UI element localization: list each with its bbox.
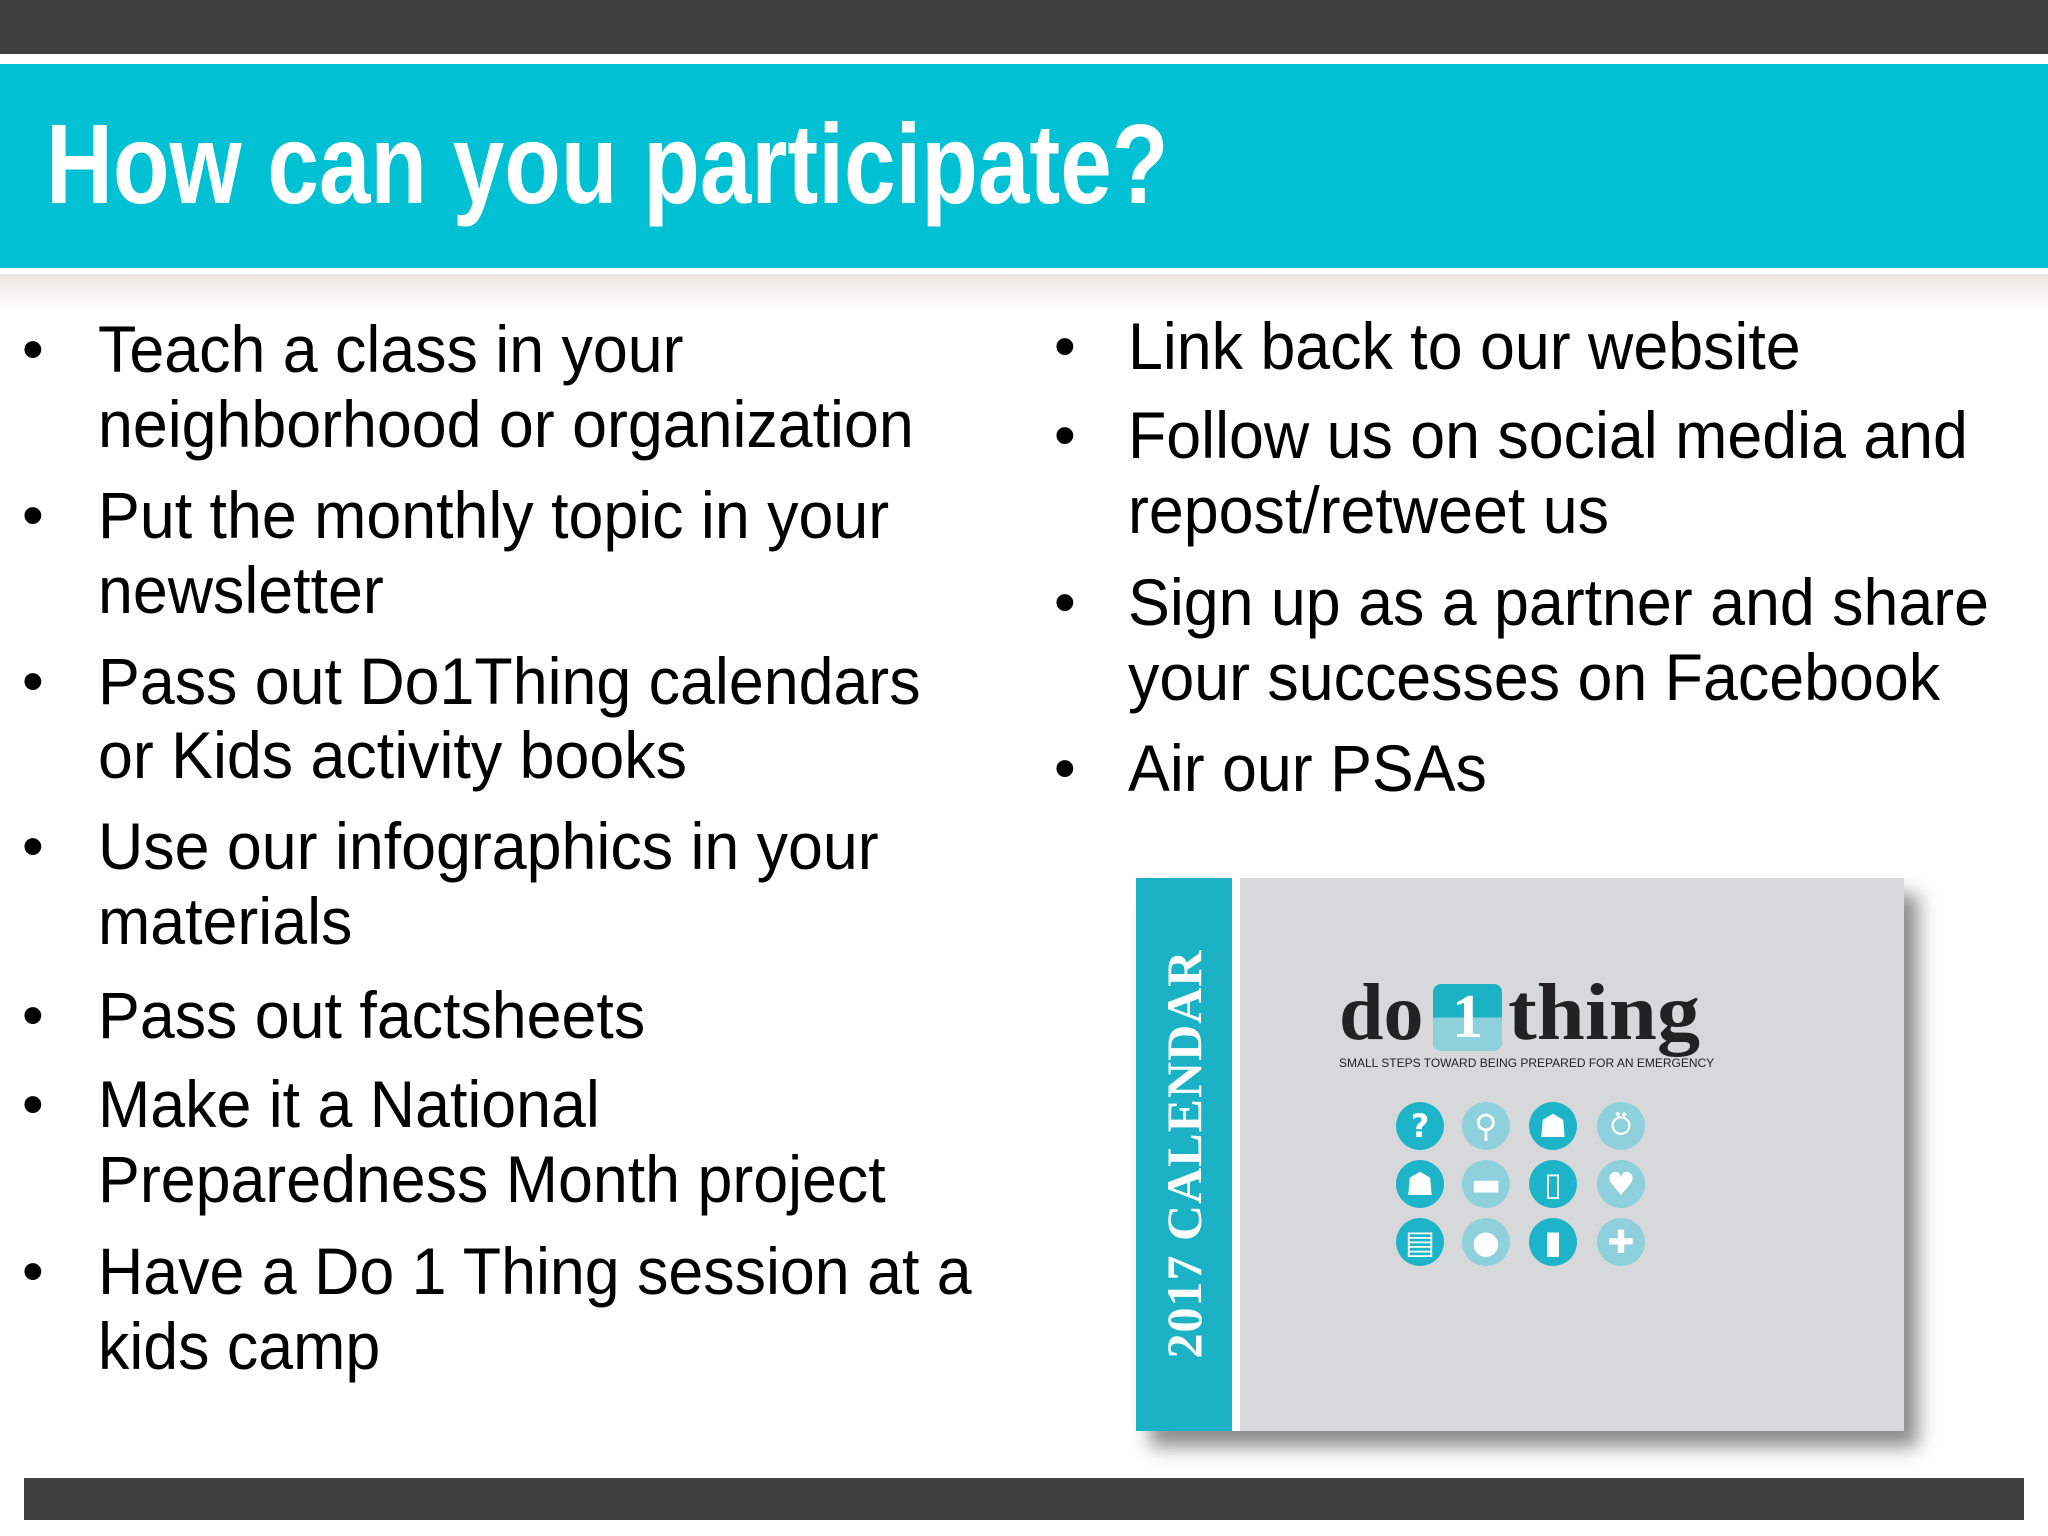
- calendar image: [1136, 878, 1904, 1431]
- right bullet list: [1054, 309, 1989, 805]
- right bullet list: •: [1054, 568, 1076, 637]
- logo: do: [1339, 969, 1424, 1057]
- left bullet list: newsletter: [98, 553, 384, 627]
- left bullet list: Preparedness Month project: [98, 1142, 886, 1216]
- icon grid: ✚: [1608, 1223, 1634, 1261]
- icon grid: ♥: [1607, 1165, 1635, 1203]
- icon grid: ☗: [1406, 1165, 1434, 1203]
- left bullet list: Pass out factsheets: [98, 978, 645, 1052]
- icon grid: ⍥: [1611, 1107, 1631, 1145]
- icon grid: ▤: [1405, 1223, 1435, 1261]
- right bullet list: •: [1054, 312, 1076, 381]
- left bullet list: kids camp: [98, 1309, 380, 1383]
- icon grid: [1396, 1102, 1645, 1266]
- left bullet list: or Kids activity books: [98, 718, 687, 792]
- logo: [1339, 969, 1700, 1057]
- icon grid: ⚲: [1474, 1107, 1498, 1145]
- right bullet list: Follow us on social media and: [1128, 398, 1968, 472]
- left bullet list: •: [22, 1237, 44, 1306]
- left bullet list: •: [22, 981, 44, 1050]
- icon grid: ?: [1411, 1107, 1429, 1145]
- title: How can you participate?: [46, 101, 1168, 227]
- left bullet list: Teach a class in your: [98, 312, 683, 386]
- left bullet list: Make it a National: [98, 1067, 600, 1141]
- logo: thing: [1508, 969, 1700, 1057]
- right bullet list: Sign up as a partner and share: [1128, 565, 1989, 639]
- right bullet list: •: [1054, 734, 1076, 803]
- left bullet list: Use our infographics in your: [98, 809, 879, 883]
- left bullet list: materials: [98, 884, 352, 958]
- right bullet list: Link back to our website: [1128, 309, 1801, 383]
- banner shadow: [0, 274, 2048, 310]
- left bullet list: •: [22, 481, 44, 550]
- icon grid: ▮: [1544, 1223, 1562, 1261]
- right bullet list: your successes on Facebook: [1128, 640, 1940, 714]
- spine text: 2017 CALENDAR: [1156, 950, 1212, 1358]
- right bullet list: repost/retweet us: [1128, 473, 1609, 547]
- icon grid: ●: [1472, 1223, 1500, 1261]
- icon grid: ☗: [1539, 1107, 1567, 1145]
- bottom dark bar: [24, 1478, 2024, 1520]
- left bullet list: Have a Do 1 Thing session at a: [98, 1234, 972, 1308]
- left bullet list: •: [22, 315, 44, 384]
- title banner: [0, 64, 2048, 268]
- icon grid: ▯: [1544, 1165, 1562, 1203]
- calendar spine: [1136, 878, 1232, 1431]
- left bullet list: [22, 312, 972, 1383]
- right bullet list: Air our PSAs: [1128, 731, 1487, 805]
- right bullet list: •: [1054, 401, 1076, 470]
- left bullet list: •: [22, 812, 44, 881]
- logo: 1: [1452, 983, 1483, 1051]
- left bullet list: Put the monthly topic in your: [98, 478, 889, 552]
- top dark bar: [0, 0, 2048, 54]
- icon grid: ▬: [1471, 1165, 1501, 1203]
- left bullet list: neighborhood or organization: [98, 387, 914, 461]
- tagline: SMALL STEPS TOWARD BEING PREPARED FOR AN EMERGENCY: [1339, 1056, 1714, 1070]
- left bullet list: •: [22, 647, 44, 716]
- left bullet list: Pass out Do1Thing calendars: [98, 644, 921, 718]
- left bullet list: •: [22, 1070, 44, 1139]
